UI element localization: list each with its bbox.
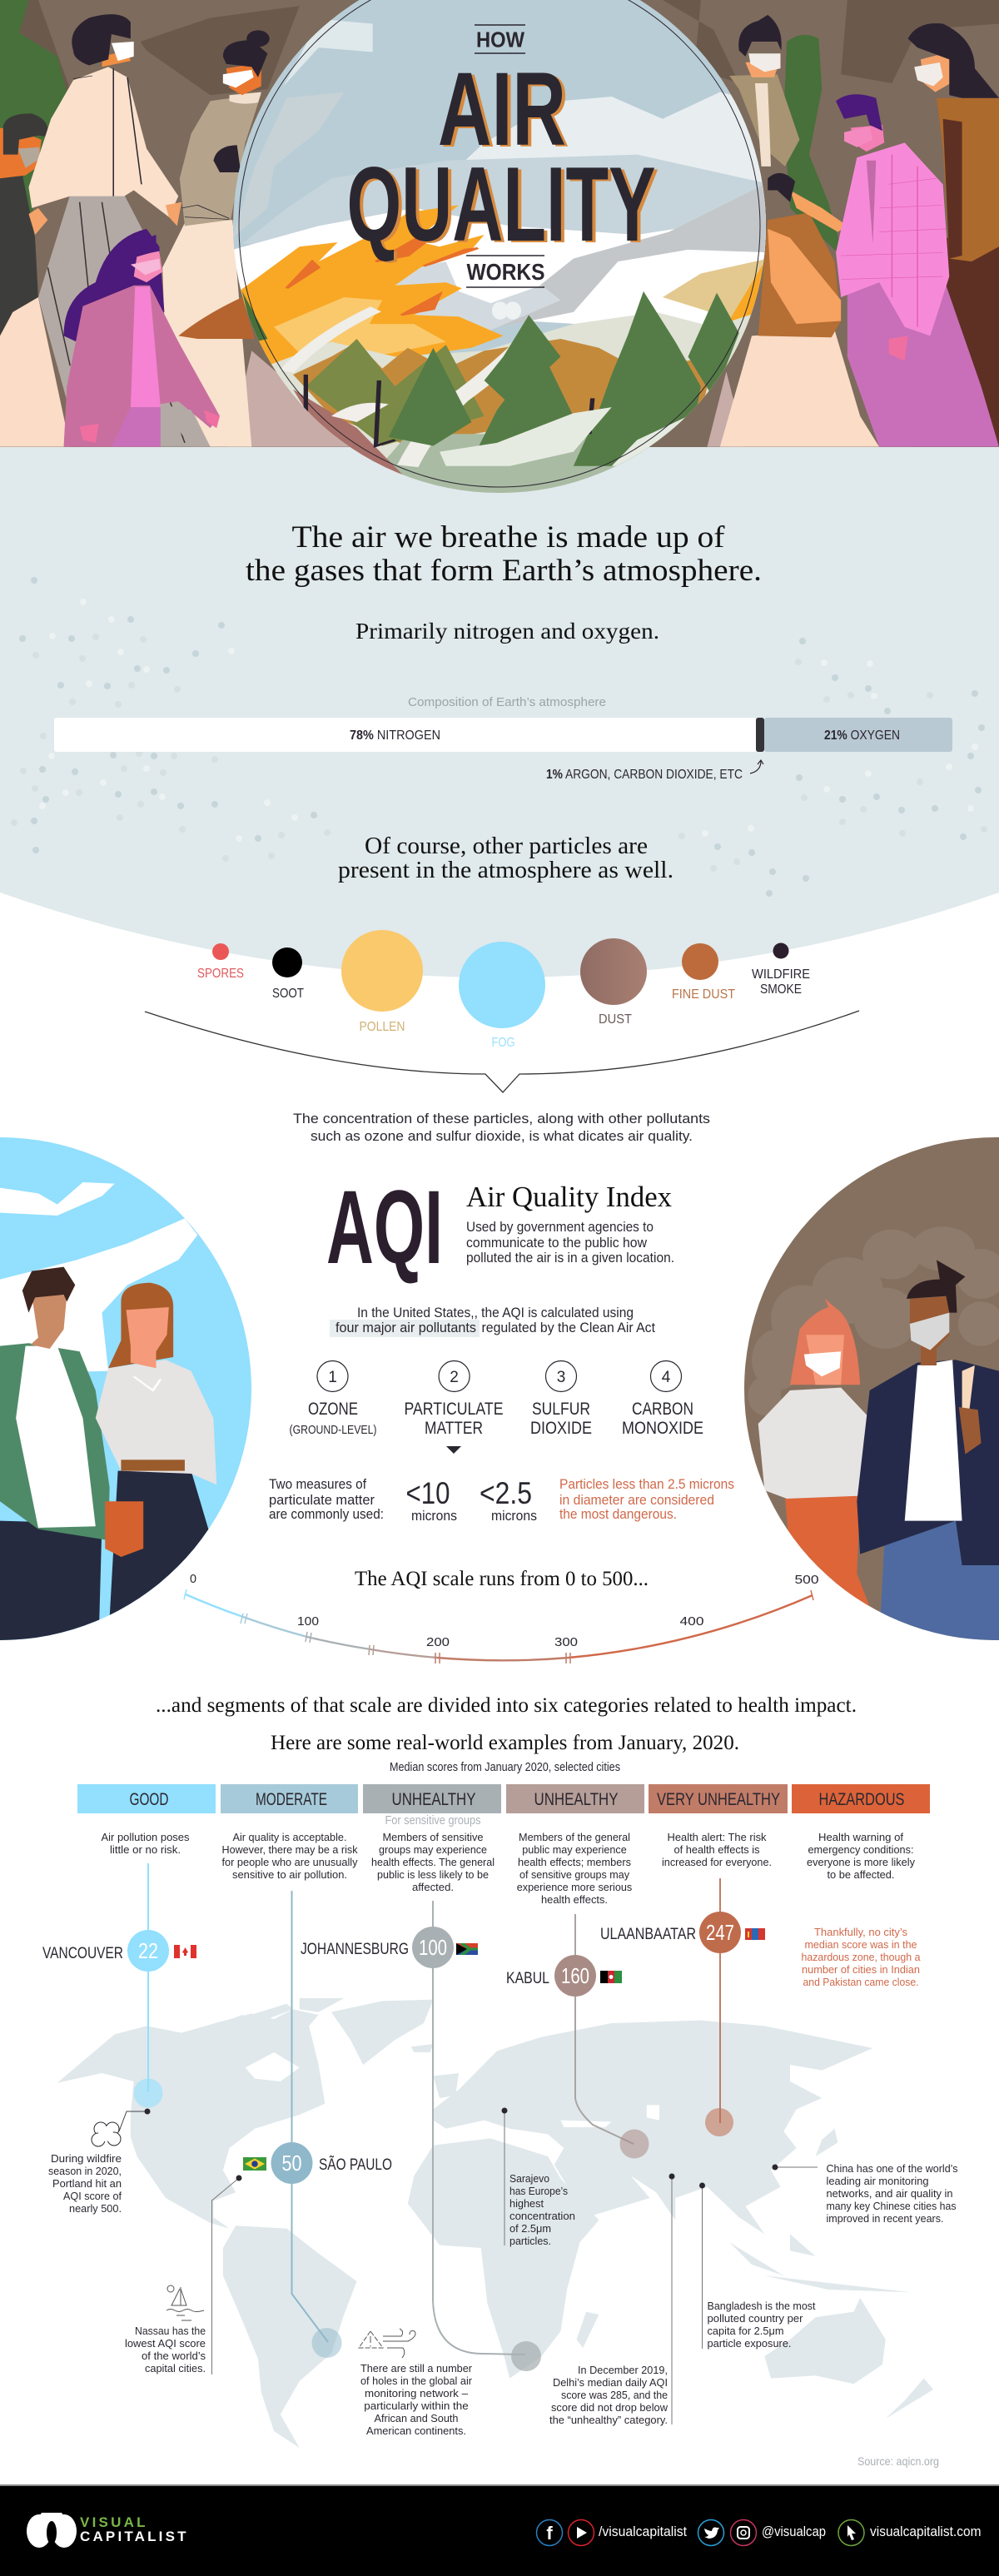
description: very unhealthy: Health alert: The risk xyxy=(668,1831,767,1843)
callout: no city in hazardous zone: Thankfully, no city’s xyxy=(814,1926,907,1938)
map: North America xyxy=(57,2009,325,2229)
city marker: Kabul xyxy=(506,1914,649,2158)
text xyxy=(360,2362,473,2437)
heading: other particles xyxy=(338,833,673,883)
description: unhealthy: public may experience xyxy=(522,1843,627,1856)
leader line xyxy=(211,2178,239,2375)
callout: most dangerous particles: Particles less than 2.5 microns xyxy=(559,1477,734,1492)
map: British Isles xyxy=(433,2073,459,2098)
text: of the world’s xyxy=(142,2350,206,2362)
text: score did not drop below xyxy=(551,2401,668,2414)
flag: Brazil xyxy=(243,2157,266,2171)
city marker: Vancouver xyxy=(42,1863,196,2108)
particle: pollen: POLLEN xyxy=(360,1020,405,1034)
description: hazardous: Health warning of xyxy=(818,1831,903,1843)
pine trees xyxy=(389,291,739,466)
logo: Visual Capitalist xyxy=(27,2513,186,2548)
text: There are still a number xyxy=(360,2362,473,2375)
map: Iceland xyxy=(411,2044,433,2052)
AQI definition: polluted the air is in a given location. xyxy=(466,1250,674,1266)
city marker: Johannesburg: 100 xyxy=(419,1935,447,1960)
category: unhealthy for sensitive groups: For sensitive groups xyxy=(385,1814,481,1828)
pollutant 4: carbon monoxide: 4 xyxy=(662,1369,671,1386)
particle: dust xyxy=(580,938,647,1027)
flag: Mongolia xyxy=(745,1928,765,1940)
intro heading: The air we breathe is made up of xyxy=(291,520,725,554)
person: woman in white blouse xyxy=(96,1283,216,1640)
AQI heading block xyxy=(326,1170,674,1286)
pollutant 1: ozone: OZONE xyxy=(308,1400,358,1419)
particle: spores xyxy=(197,943,244,981)
map: Japan xyxy=(816,2129,837,2156)
text: season in 2020, xyxy=(48,2165,122,2177)
city marker: Johannesburg: JOHANNESBURG xyxy=(301,1941,409,1958)
text: concentration of particles: The concentration of these particles, along with other pollutants xyxy=(293,1111,710,1126)
text: particle exposure. xyxy=(708,2337,791,2350)
particle: wildfire smoke: SMOKE xyxy=(760,982,802,997)
pollutant 2: particulate matter: PARTICULATE xyxy=(405,1400,503,1419)
pollutant 3: sulfur dioxide: DIOXIDE xyxy=(530,1419,592,1438)
title word: QUALITY xyxy=(346,145,659,265)
text: many key Chinese cities has xyxy=(826,2200,957,2212)
segment: other gases xyxy=(756,718,764,752)
text: has Europe’s xyxy=(509,2185,568,2197)
callout: no city in hazardous zone xyxy=(801,1926,921,1988)
leader line xyxy=(671,2176,673,2424)
description: unhealthy xyxy=(517,1831,633,1906)
particles row xyxy=(197,930,810,1050)
segment: nitrogen xyxy=(54,718,757,752)
description: unhealthy for sensitive groups xyxy=(371,1831,495,1893)
annotation: Sarajevo xyxy=(501,2108,575,2247)
flag: South Africa xyxy=(456,1943,478,1955)
map: Greenland xyxy=(331,2000,433,2065)
text: of holes in the global air xyxy=(360,2375,473,2387)
pollutant 1: ozone: 1 xyxy=(328,1369,337,1386)
text: capital cities. xyxy=(145,2362,206,2375)
leader line xyxy=(119,2111,147,2131)
text xyxy=(708,2300,816,2350)
pollutant list xyxy=(290,1360,703,1454)
heading: six categories: ...and segments of that scale are divided into six categories related to health impact. xyxy=(156,1694,857,1717)
scale labels: 400 xyxy=(679,1614,704,1629)
measure: less than 2.5 microns: <2.5 xyxy=(480,1476,532,1510)
callout: no city in hazardous zone: median score was in the xyxy=(804,1938,917,1951)
text: monitoring network – xyxy=(365,2387,469,2399)
category: hazardous xyxy=(792,1784,930,1813)
description: unhealthy: health effects; members xyxy=(518,1856,631,1868)
text: nearly 500. xyxy=(69,2202,122,2215)
text: particles. xyxy=(509,2235,551,2247)
text: Portland hit an xyxy=(52,2177,122,2190)
text: AQI score of xyxy=(63,2190,122,2202)
category: very unhealthy xyxy=(649,1784,788,1813)
hero illustration: crowd in masks xyxy=(0,0,999,447)
text: two measures: particulate matter xyxy=(269,1493,375,1508)
map: Australia xyxy=(764,2298,886,2384)
text: concentration xyxy=(509,2210,575,2222)
particle: soot xyxy=(272,947,304,1001)
scale labels: 100 xyxy=(297,1614,319,1629)
pollutant 4: carbon monoxide: CARBON xyxy=(632,1400,693,1419)
leader line xyxy=(775,2166,818,2168)
description: moderate: for people who are unusually xyxy=(221,1856,358,1868)
category: moderate xyxy=(221,1784,358,1813)
small logo mark xyxy=(492,301,521,320)
measure: less than 2.5 microns xyxy=(480,1476,537,1524)
map: New Zealand xyxy=(886,2379,933,2419)
text: the “unhealthy” category. xyxy=(549,2414,668,2426)
annotation: Delhi xyxy=(549,2173,674,2426)
person: man in green cardigan xyxy=(0,1267,110,1640)
text: polluted country per xyxy=(708,2312,803,2325)
measure: less than 2.5 microns: microns xyxy=(491,1509,537,1524)
curved brace pointer xyxy=(145,1011,859,1092)
city marker: Sao Paulo: SÃO PAULO xyxy=(319,2156,392,2174)
city marker: Kabul: KABUL xyxy=(506,1970,549,1987)
particle: dust: DUST xyxy=(599,1012,632,1027)
text xyxy=(509,2172,575,2247)
text: improved in recent years. xyxy=(826,2212,944,2225)
category: good xyxy=(77,1784,216,1813)
city marker: Sao Paulo xyxy=(243,1891,392,2358)
text: Sarajevo xyxy=(509,2172,549,2185)
text: leading air monitoring xyxy=(826,2175,929,2187)
description: very unhealthy: of health effects is xyxy=(674,1843,760,1856)
description: good: Air pollution poses xyxy=(102,1831,190,1843)
text: In December 2019, xyxy=(578,2364,668,2376)
globe illustration: wildfire scene inside circle xyxy=(225,0,774,500)
flames xyxy=(239,205,764,371)
pollutant 4: carbon monoxide: MONOXIDE xyxy=(622,1419,703,1438)
text: African and South xyxy=(375,2412,458,2424)
map: Africa xyxy=(408,2138,599,2379)
person: man in khaki overshirt xyxy=(729,15,799,167)
intro heading xyxy=(246,520,762,588)
source: Source: aqicn.org xyxy=(857,2454,939,2468)
particle: pollen xyxy=(341,930,423,1034)
social: YouTube xyxy=(568,2519,594,2546)
title word: HOW: HOW xyxy=(476,27,524,52)
particle: wildfire smoke xyxy=(752,942,810,997)
callout: no city in hazardous zone: hazardous zone, though a xyxy=(801,1951,921,1963)
heading: real-world examples: Here are some real-world examples from January, 2020. xyxy=(271,1732,739,1754)
particle: fog: FOG xyxy=(491,1036,514,1050)
text: particularly within the xyxy=(364,2399,469,2412)
pollutant 3: sulfur dioxide xyxy=(530,1360,592,1438)
chart: composition of atmosphere bar xyxy=(54,696,952,782)
description: moderate: However, there may be a risk xyxy=(221,1843,358,1856)
text: of 2.5μm xyxy=(509,2222,551,2235)
pollutant 2: particulate matter xyxy=(405,1360,503,1454)
heading: other particles: Of course, other particles are xyxy=(365,833,648,859)
measure: less than 10 microns: microns xyxy=(411,1509,457,1524)
annotation: Portland wildfire xyxy=(48,2108,150,2215)
text: two measures xyxy=(269,1477,384,1522)
title word: QUALITY: QUALITY xyxy=(350,147,659,265)
big AQI letters: AQI xyxy=(326,1170,443,1286)
text: American continents. xyxy=(366,2424,466,2437)
illustration: right circle with people in brown smoky air xyxy=(733,1132,999,1649)
person: woman in white shirt xyxy=(28,14,211,447)
person: woman in pink jacket with purple hair xyxy=(64,229,220,447)
flag: Canada xyxy=(174,1945,196,1958)
text xyxy=(826,2162,958,2225)
smoke texture xyxy=(748,1226,999,1415)
chart title: Composition of Earth’s atmosphere xyxy=(408,696,606,709)
segment: oxygen: 21% OXYGEN xyxy=(824,729,900,743)
category: unhealthy xyxy=(506,1784,644,1813)
text xyxy=(549,2364,668,2426)
title word: WORKS: WORKS xyxy=(466,259,544,285)
icon: warning triangle and wind xyxy=(359,2329,415,2358)
person: woman with red hair xyxy=(758,1299,869,1607)
pollutant 3: sulfur dioxide: 3 xyxy=(557,1369,565,1386)
text: networks, and air quality in xyxy=(826,2187,952,2200)
logo: Visual Capitalist: VISUAL xyxy=(80,2514,145,2530)
title word: AIR: AIR xyxy=(441,53,569,169)
map: South America xyxy=(223,2225,357,2448)
description: moderate: sensitive to air pollution. xyxy=(232,1868,347,1881)
particle: spores: SPORES xyxy=(197,967,244,981)
chart: AQI scale arc xyxy=(184,1572,819,1663)
page background: pale atmosphere panel xyxy=(0,441,999,977)
text xyxy=(125,2325,206,2375)
description: unhealthy: health effects. xyxy=(541,1893,608,1906)
text: concentration of particles xyxy=(293,1111,710,1144)
annotation: China xyxy=(773,2162,958,2225)
description: unhealthy for sensitive groups: health effects. The general xyxy=(371,1856,495,1868)
city marker: Vancouver: VANCOUVER xyxy=(42,1945,123,1962)
text: two measures: Two measures of xyxy=(269,1477,366,1492)
icon: sailboat xyxy=(166,2285,204,2320)
callout: no city in hazardous zone: and Pakistan came close. xyxy=(803,1976,919,1988)
particle: fine dust xyxy=(672,943,735,1002)
city marker: Johannesburg xyxy=(301,1901,541,2371)
person: man in pink plaid shirt xyxy=(836,94,999,447)
pollutant 1: ozone xyxy=(290,1360,376,1437)
pollutant 2: particulate matter: 2 xyxy=(450,1369,459,1386)
callout: one percent other gases: 1% ARGON, CARBON DIOXIDE, ETC xyxy=(546,768,743,782)
social: Facebook xyxy=(536,2519,563,2546)
description: good xyxy=(102,1831,190,1856)
pollutant 3: sulfur dioxide: SULFUR xyxy=(532,1400,590,1419)
illustration: left circle with man and woman under blue sky xyxy=(0,1132,258,1649)
segment: nitrogen: 78% NITROGEN xyxy=(350,729,440,743)
title: How Air Quality Works xyxy=(346,25,659,287)
map: Eurasia xyxy=(433,2021,872,2234)
text: four major pollutants intro: In the United States,, the AQI is calculated using xyxy=(357,1305,634,1320)
subheading: primarily nitrogen and oxygen: Primarily nitrogen and oxygen. xyxy=(355,619,659,644)
leader line xyxy=(701,2186,703,2349)
particle: wildfire smoke: WILDFIRE xyxy=(752,967,810,982)
text: concentration of particles: such as ozone and sulfur dioxide, is what dicates air quality. xyxy=(311,1129,693,1144)
AQI definition xyxy=(466,1219,674,1266)
footer xyxy=(0,2484,999,2576)
person: brown sleeve at the globe edge xyxy=(178,297,255,339)
text: lowest AQI score xyxy=(125,2337,206,2350)
description: good: little or no risk. xyxy=(110,1843,181,1856)
description: unhealthy: of sensitive groups may xyxy=(519,1868,629,1881)
measure: less than 10 microns: <10 xyxy=(406,1476,450,1510)
smoke clouds xyxy=(232,17,774,336)
map: Madagascar xyxy=(577,2312,599,2348)
category: moderate: MODERATE xyxy=(256,1790,327,1809)
callout: most dangerous particles: in diameter are considered xyxy=(559,1493,714,1508)
text: Delhi’s median daily AQI xyxy=(553,2376,668,2389)
AQI definition: Used by government agencies to xyxy=(466,1219,654,1235)
chart subtitle: Median scores from January 2020, selected cities xyxy=(390,1760,620,1774)
particle: fine dust: FINE DUST xyxy=(672,987,735,1002)
description: very unhealthy xyxy=(662,1831,772,1868)
callout: no city in hazardous zone: number of cities in Indian xyxy=(802,1963,920,1976)
description: unhealthy for sensitive groups: Members of sensitive xyxy=(383,1831,483,1843)
person: woman in khaki sweater xyxy=(162,30,270,447)
segment: oxygen xyxy=(764,718,952,752)
description: moderate: Air quality is acceptable. xyxy=(233,1831,346,1843)
title word: AIR: AIR xyxy=(438,52,566,167)
pollutant 1: ozone: (GROUND-LEVEL) xyxy=(290,1423,376,1437)
forest floor xyxy=(267,309,758,494)
handle: visualcap: @visualcap xyxy=(762,2524,826,2539)
map: Southeast Asia islands xyxy=(729,2234,911,2292)
description: hazardous: emergency conditions: xyxy=(808,1843,914,1856)
description: unhealthy for sensitive groups: public is less likely to be xyxy=(377,1868,489,1881)
description: hazardous: to be affected. xyxy=(828,1868,894,1881)
world map xyxy=(57,1998,933,2448)
AQI full name: Air Quality Index xyxy=(466,1181,672,1213)
category: unhealthy for sensitive groups xyxy=(363,1784,501,1828)
social: website cursor xyxy=(838,2519,864,2546)
icon: wildfire smoke cloud xyxy=(92,2122,121,2146)
text xyxy=(48,2152,122,2215)
description: unhealthy: Members of the general xyxy=(519,1831,630,1843)
heading: AQI scale: The AQI scale runs from 0 to 500... xyxy=(355,1568,649,1590)
city marker: Ulaanbaatar xyxy=(600,1878,765,2136)
background particle dots xyxy=(14,580,984,893)
person: man with backpack xyxy=(720,173,879,447)
globe ring xyxy=(239,0,760,487)
scale labels xyxy=(190,1572,819,1649)
description: very unhealthy: increased for everyone. xyxy=(662,1856,772,1868)
category: very unhealthy: VERY UNHEALTHY xyxy=(657,1790,780,1809)
category: unhealthy: UNHEALTHY xyxy=(534,1790,618,1809)
callout: most dangerous particles: the most dangerous. xyxy=(559,1507,677,1522)
text: four major pollutants intro: four major air pollutants xyxy=(335,1320,476,1335)
text: four major pollutants intro: regulated by the Clean Air Act xyxy=(481,1320,655,1335)
city marker: Kabul: 160 xyxy=(561,1963,589,1988)
scale labels: 0 xyxy=(190,1572,196,1586)
text: two measures: are commonly used: xyxy=(269,1507,384,1522)
annotation: Bangladesh xyxy=(699,2183,816,2350)
category descriptions xyxy=(102,1831,921,1988)
pollutant 4: carbon monoxide xyxy=(622,1360,703,1438)
social: Twitter xyxy=(698,2519,724,2546)
category: hazardous: HAZARDOUS xyxy=(819,1790,904,1809)
city marker: Sao Paulo: 50 xyxy=(281,2151,301,2176)
annotation: Nassau xyxy=(125,2175,241,2375)
callout: most dangerous particles xyxy=(559,1477,734,1522)
scale labels: 200 xyxy=(426,1635,450,1649)
logo: Visual Capitalist: CAPITALIST xyxy=(80,2529,186,2544)
text: highest xyxy=(509,2197,544,2210)
description: unhealthy for sensitive groups: groups may experience xyxy=(379,1843,487,1856)
particle: soot: SOOT xyxy=(272,987,304,1001)
city marker: Ulaanbaatar: ULAANBAATAR xyxy=(600,1926,696,1943)
map: inland seas xyxy=(246,2052,659,2127)
person: man with top knot xyxy=(857,1260,999,1640)
social: Instagram xyxy=(731,2519,756,2546)
annotation: monitoring network holes xyxy=(359,2329,473,2437)
text: Bangladesh is the most xyxy=(708,2300,816,2312)
title word: QUALITY: QUALITY xyxy=(346,145,656,263)
handle: visualcapitalist: /visualcapitalist xyxy=(599,2524,687,2539)
category header row xyxy=(77,1784,930,1828)
text: China has one of the world’s xyxy=(826,2162,958,2175)
particle: fog xyxy=(459,942,545,1050)
intro heading: the gases that form Earth’s atmosphere. xyxy=(246,554,762,588)
pollutant 2: particulate matter: MATTER xyxy=(425,1419,483,1438)
description: hazardous xyxy=(807,1831,915,1881)
flag: Afghanistan xyxy=(600,1971,622,1983)
scale labels: 300 xyxy=(554,1635,578,1649)
text: During wildfire xyxy=(51,2152,122,2165)
AQI definition: communicate to the public how xyxy=(466,1235,648,1251)
person: man in cap xyxy=(0,113,70,447)
description: unhealthy for sensitive groups: affected. xyxy=(412,1881,454,1893)
text: score was 285, and the xyxy=(561,2389,668,2401)
website address: visualcapitalist.com xyxy=(870,2524,981,2539)
category: good: GOOD xyxy=(130,1790,168,1809)
description: moderate xyxy=(221,1831,358,1881)
person: woman in brown coat xyxy=(905,23,999,447)
leader line xyxy=(504,2111,505,2245)
map: Arctic islands xyxy=(213,1998,344,2031)
description: unhealthy: experience more serious xyxy=(517,1881,633,1893)
category: unhealthy for sensitive groups: UNHEALTHY xyxy=(391,1790,476,1809)
city marker: Ulaanbaatar: 247 xyxy=(706,1920,734,1945)
text: four major pollutants intro xyxy=(330,1305,655,1337)
scale labels: 500 xyxy=(794,1573,819,1587)
particulate matter measures xyxy=(269,1476,734,1524)
text: Nassau has the xyxy=(135,2325,206,2337)
callout: one percent other gases xyxy=(546,760,763,782)
city marker: Vancouver: 22 xyxy=(138,1938,158,1963)
description: hazardous: everyone is more likely xyxy=(807,1856,915,1868)
heading: other particles: present in the atmosphere as well. xyxy=(338,858,673,883)
social: Facebook: f xyxy=(546,2523,553,2544)
text: capita for 2.5μm xyxy=(708,2325,784,2337)
